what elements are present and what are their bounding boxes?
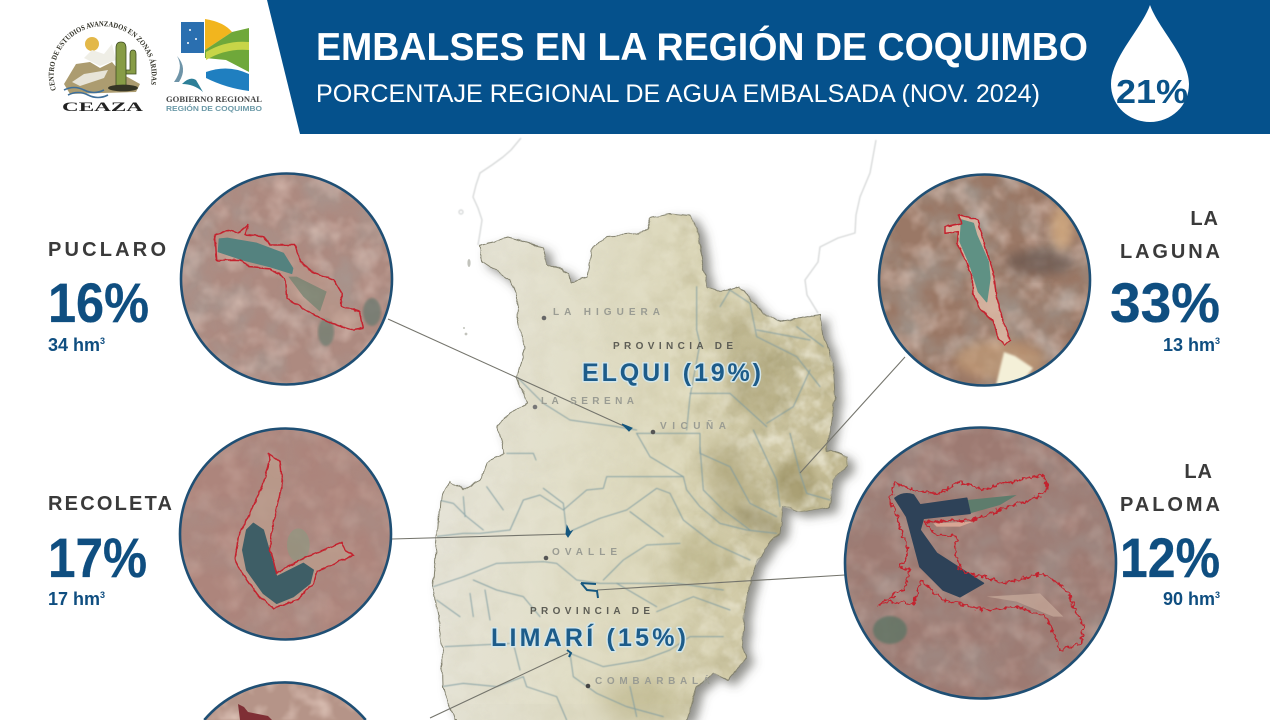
title: EMBALSES EN LA REGIÓN DE COQUIMBO [316, 25, 1088, 69]
label: Puclaro: 34 hm [48, 335, 100, 355]
map rivers [433, 287, 830, 720]
town: La Higuera: LA HIGUERA [553, 307, 660, 318]
label: Recoleta: 17 hm [48, 589, 100, 609]
icon: water drop with regional percentage: 21% [1116, 73, 1188, 110]
label: La Laguna: 13 hm [1163, 335, 1215, 355]
label: Recoleta: 3 [100, 590, 105, 600]
province: Limarí: PROVINCIA DE [530, 606, 650, 617]
town: La Serena: LA SERENA [541, 396, 634, 407]
label: Puclaro: 3 [100, 336, 105, 346]
label: Puclaro: 16% [48, 271, 149, 334]
logo: CEAZA: CEAZA [62, 99, 144, 114]
province: Limarí: LIMARÍ (15%) [491, 623, 686, 652]
offshore islands [463, 259, 471, 335]
label: La Paloma: 3 [1215, 590, 1220, 600]
town: Vicuña: VICUÑA [660, 419, 726, 432]
province: Limarí [491, 606, 686, 652]
icon: water drop with regional percentage [1111, 5, 1189, 122]
label: La Paloma [1120, 461, 1220, 609]
map bottom edge fill [452, 704, 690, 720]
subtitle: PORCENTAJE REGIONAL DE AGUA EMBALSADA (NOV. 2024) [316, 80, 1040, 108]
leader lines [388, 319, 905, 718]
map: Coquimbo region [430, 210, 855, 720]
label: La Laguna: 3 [1215, 336, 1220, 346]
town: Vicuña [651, 419, 726, 434]
panel: La Paloma satellite circle [842, 425, 1120, 701]
international and regional boundary lines [459, 138, 876, 313]
logo: Gobierno Regional de Coquimbo: REGIÓN DE COQUIMBO [166, 104, 262, 113]
map place labels [491, 307, 761, 688]
label: Recoleta [48, 493, 172, 609]
panel: Recoleta satellite circle [178, 426, 394, 642]
label: La Laguna: 33% [1110, 271, 1220, 334]
province: Elqui: PROVINCIA DE [613, 341, 733, 352]
label: La Paloma: PALOMA [1120, 494, 1220, 516]
province: Elqui: ELQUI (19%) [582, 359, 761, 387]
label: La Paloma: 12% [1120, 526, 1220, 589]
panel: Puclaro satellite circle [178, 171, 396, 387]
town: Ovalle: OVALLE [552, 547, 617, 558]
map land [433, 214, 848, 720]
map relief shading [430, 210, 855, 720]
label: Puclaro: PUCLARO [48, 239, 166, 261]
logo: CEAZA: CENTRO DE ESTUDIOS AVANZADOS EN ZONAS ÁRIDAS [48, 21, 157, 91]
panel: La Laguna satellite circle [876, 172, 1094, 388]
label: La Laguna: LA [1190, 208, 1219, 230]
header banner [267, 0, 1270, 134]
label: La Laguna [1110, 208, 1220, 355]
town: Combarbalá: COMBARBALÁ [595, 674, 710, 687]
label: La Paloma: 90 hm [1163, 589, 1215, 609]
label: Recoleta: RECOLETA [48, 493, 172, 515]
logo: Gobierno Regional de Coquimbo: GOBIERNO REGIONAL [166, 94, 262, 104]
logo: Gobierno Regional de Coquimbo [166, 19, 262, 113]
label: Puclaro [48, 239, 166, 355]
reservoirs on map [566, 424, 632, 657]
label: Recoleta: 17% [48, 526, 147, 589]
panel: third reservoir satellite circle [203, 681, 367, 720]
label: La Laguna: LAGUNA [1120, 241, 1220, 263]
label: La Paloma: LA [1184, 461, 1213, 483]
province: Elqui [582, 341, 761, 387]
